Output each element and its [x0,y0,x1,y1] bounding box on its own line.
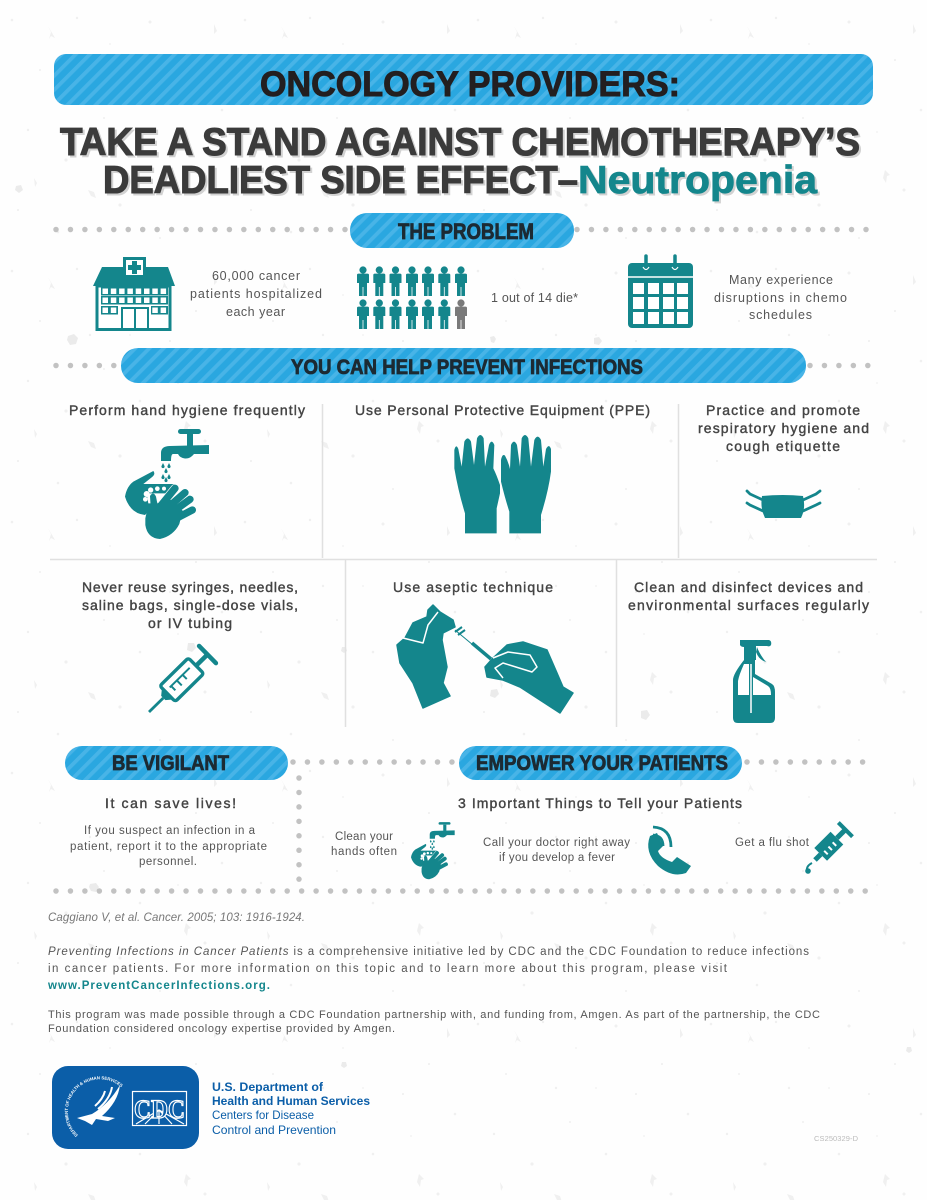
section pill: the problem: THE PROBLEM [398,219,534,244]
main headline [60,121,860,202]
agency names [212,1080,370,1137]
icon: gloves [454,435,551,533]
PPE heading: Use Personal Protective Equipment (PPE) [355,402,650,418]
program description: www.PreventCancerInfections.org. [47,980,270,992]
section pill: empower your patients [459,746,742,780]
respiratory heading: cough etiquette [726,438,840,454]
flu shot text: Get a flu shot [735,837,810,849]
icon: hospital [93,257,175,330]
banner title: ONCOLOGY PROVIDERS: [260,65,680,104]
agency names: U.S. Department of [212,1080,324,1094]
never reuse heading [82,579,298,631]
main headline: Neutropenia [578,159,817,202]
panel: hand hygiene [69,402,305,539]
program description: Preventing Infections in Cancer Patients is a comprehensive initiative led by CDC and the CDC Foundation to reduce infections [48,946,809,958]
empower heading: 3 Important Things to Tell your Patients [458,795,742,811]
publication code: CS250329-D [814,1134,859,1143]
never reuse heading: or IV tubing [148,615,232,631]
panel: never reuse [82,579,298,721]
never reuse heading: saline bags, single-dose vials, [82,597,298,613]
panel: be vigilant text: If you suspect an infection in a [84,825,256,837]
hospitalizations text [190,269,322,319]
HHS seal: DEPARTMENT OF HEALTH & HUMAN SERVICES · USA [64,1076,123,1137]
panel: respiratory hygiene [698,402,869,518]
panel: be vigilant text: personnel. [139,856,197,868]
icon: small hand washing [411,822,455,879]
clean hands text [331,831,397,858]
program description: in cancer patients. For more information on this topic and to learn more about this program, please visit [48,963,728,975]
chemo disruption text: Many experience [729,273,833,287]
hospitalizations text: each year [226,305,285,319]
fever text: if you develop a fever [499,852,615,864]
section pill: empower your patients: EMPOWER YOUR PATIENTS [476,752,728,775]
panel: empower your patients [331,795,854,879]
funding note: Foundation considered oncology expertise provided by Amgen. [48,1023,395,1035]
icon: calendar [628,256,693,328]
CDC box: CDC [134,1095,185,1124]
icon: phone [648,827,691,874]
aseptic heading: Use aseptic technique [393,579,553,595]
agency names: Centers for Disease [212,1108,314,1122]
icon: spray bottle [733,640,775,723]
chemo disruption text: disruptions in chemo [714,291,847,305]
clean hands text: hands often [331,846,397,858]
citation: Caggiano V, et al. Cancer. 2005; 103: 1916-1924. [48,912,305,924]
icon: flu syringe [805,821,854,874]
respiratory heading [698,402,869,454]
section pill: you can help [121,348,806,383]
section pill: be vigilant [65,746,288,780]
divider dots [56,230,872,891]
clean hands text: Clean your [335,831,393,843]
main headline: DEADLIEST SIDE EFFECT– [103,159,578,202]
respiratory heading: Practice and promote [706,402,860,418]
fever text: Call your doctor right away [483,837,630,849]
icon: 14 people, one grey [357,266,467,329]
never reuse heading: Never reuse syringes, needles, [82,579,298,595]
chemo disruption text: schedules [749,308,812,322]
agency names: Control and Prevention [212,1123,336,1137]
panel: aseptic technique [393,579,573,713]
agency names: Health and Human Services [212,1094,370,1108]
respiratory heading: respiratory hygiene and [698,420,869,436]
section pill: you can help: YOU CAN HELP PREVENT INFECTIONS [291,356,643,379]
panel: be vigilant text: patient, report it to the appropriate [70,841,267,853]
icon: hand washing [125,429,209,539]
funding note [48,1009,820,1035]
grid lines [50,404,877,727]
section pill: be vigilant: BE VIGILANT [112,752,229,775]
panel: clean and disinfect [628,579,869,723]
icon: hands with syringe [397,605,573,713]
icon: syringe [141,646,216,721]
top banner [54,54,873,105]
logo: HHS and CDC [52,1066,199,1149]
panel: be vigilant text [70,795,267,868]
main headline: TAKE A STAND AGAINST CHEMOTHERAPY’S [60,121,860,164]
hand hygiene heading: Perform hand hygiene frequently [69,402,305,418]
clean heading [628,579,869,613]
funding note: This program was made possible through a CDC Foundation partnership with, and funding from, Amgen. As part of the partnership, the CDC [48,1009,820,1021]
HHS seal [64,1076,123,1137]
program description [47,946,809,992]
clean heading: environmental surfaces regularly [628,597,869,613]
panel: PPE [355,402,650,533]
fever text [483,837,630,864]
hospitalizations text: patients hospitalized [190,287,322,301]
hospitalizations text: 60,000 cancer [212,269,300,283]
mortality text: 1 out of 14 die* [491,291,578,305]
panel: be vigilant text: It can save lives! [105,795,236,811]
icon: face mask [747,491,820,518]
chemo disruption text [714,273,847,322]
section pill: the problem [350,213,574,248]
clean heading: Clean and disinfect devices and [634,579,863,595]
